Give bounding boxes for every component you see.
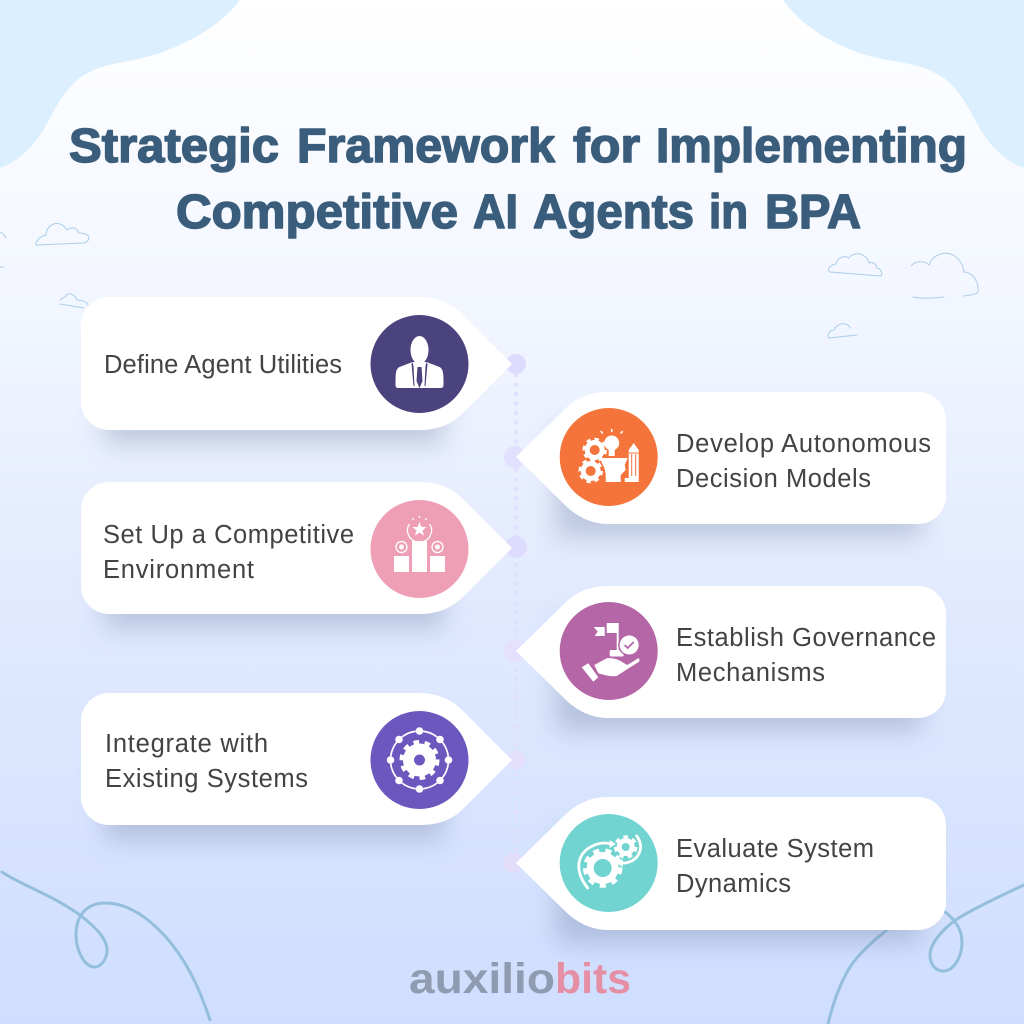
label line 2: Environment [103, 556, 254, 584]
squiggle: bottom right [828, 885, 1024, 1024]
card shape [81, 693, 512, 825]
squiggle: bottom left [2, 872, 210, 1020]
card shape [81, 297, 512, 430]
label line 2: Existing Systems [105, 765, 308, 793]
icon: gears, bulb and pencil [560, 408, 658, 506]
dotted timeline [503, 354, 527, 873]
label: Establish Governance [676, 624, 936, 652]
logo: bits [555, 955, 631, 1003]
icon: podium with star [370, 500, 468, 598]
card shape [516, 797, 946, 930]
label: Integrate with [105, 730, 268, 758]
title: Competitive [176, 186, 458, 239]
panel: Evaluate System Dynamics [516, 797, 946, 943]
logo [409, 955, 631, 1003]
label: Set Up a Competitive [103, 521, 354, 549]
blob: top left [0, 0, 240, 168]
title: for [573, 120, 640, 173]
title: Framework [297, 120, 555, 173]
title: in [709, 186, 748, 239]
panel: Set Up a Competitive Environment [81, 482, 512, 628]
panel: Develop Autonomous Decision Models [516, 392, 946, 537]
logo: auxilio [409, 955, 555, 1003]
icon: rotating gears [560, 814, 658, 912]
label: Define Agent Utilities [104, 351, 342, 379]
label line 2: Dynamics [676, 870, 791, 898]
title: Strategic [69, 120, 279, 173]
clouds [0, 223, 978, 338]
title: BPA [765, 186, 861, 239]
title: AI [473, 186, 518, 239]
blob: top right [783, 0, 1024, 168]
panel: Define Agent Utilities [81, 297, 512, 444]
title: Implementing [656, 120, 967, 173]
panel: Integrate with Existing Systems [81, 693, 512, 840]
icon: gear network [370, 711, 468, 809]
panel: Establish Governance Mechanisms [516, 586, 946, 731]
icon: hand with flag and check [560, 602, 658, 700]
label: Evaluate System [676, 835, 874, 863]
title: Agents [533, 186, 694, 239]
label line 2: Mechanisms [676, 659, 825, 687]
card shape [516, 586, 946, 718]
card shape [516, 392, 946, 524]
label line 2: Decision Models [676, 465, 871, 493]
card shape [81, 482, 512, 614]
icon: businessman [370, 315, 468, 413]
label: Develop Autonomous [676, 430, 931, 458]
title [69, 120, 967, 239]
